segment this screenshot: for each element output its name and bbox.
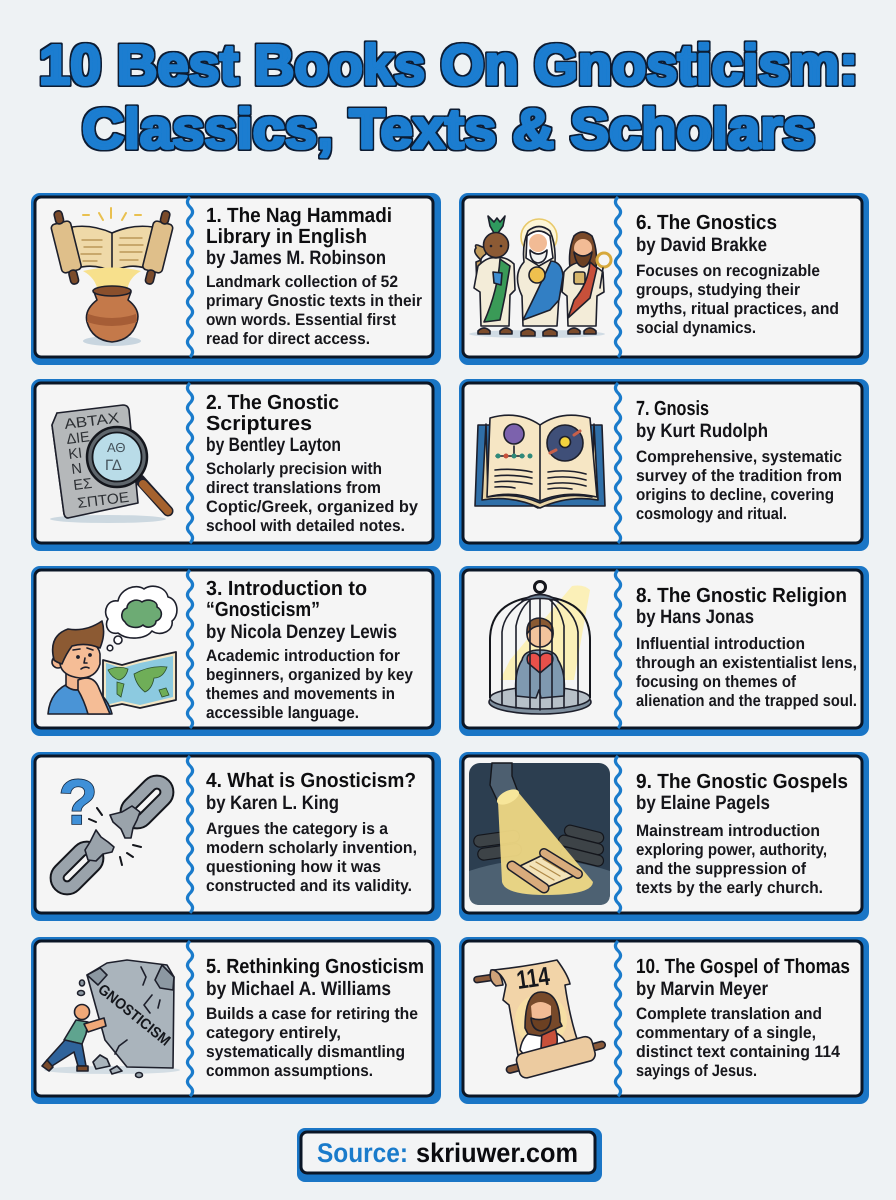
description	[636, 262, 839, 337]
description: sayings of Jesus.	[636, 1062, 757, 1080]
heading: 1. The Nag Hammadi	[206, 204, 392, 227]
panel: book 2	[31, 379, 441, 551]
icon: tablet and magnifying glass: ΑΒΤΑΧ	[64, 410, 120, 433]
description	[636, 822, 827, 897]
panel: book 10	[459, 937, 869, 1104]
icon: tablet and magnifying glass: ΕΣ	[73, 476, 93, 494]
icon: tablet and magnifying glass: ΚΙ	[68, 445, 83, 463]
description: direct translations from	[206, 479, 381, 497]
author: by James M. Robinson	[206, 247, 386, 269]
card frame	[459, 193, 869, 365]
description: Coptic/Greek, organized by	[206, 498, 419, 516]
icon: man holding heart in birdcage	[489, 582, 591, 714]
description	[206, 1005, 418, 1080]
description: Landmark collection of 52	[206, 273, 398, 291]
icon: three robed figures	[469, 216, 611, 338]
icon: tablet and magnifying glass: ΔΙΕ	[66, 429, 91, 448]
panel: book 3	[31, 566, 441, 736]
heading: Library in English	[206, 225, 367, 248]
card frame	[31, 193, 441, 365]
panel: book 4	[31, 752, 441, 921]
description: texts by the early church.	[636, 879, 823, 897]
description: and the suppression of	[636, 860, 806, 878]
icon: scroll with number 114 and portrait: 114	[515, 961, 552, 995]
card frame	[459, 379, 869, 551]
description: social dynamics.	[636, 319, 756, 337]
heading	[206, 204, 392, 248]
panel: book 8	[459, 566, 869, 736]
card frame	[31, 566, 441, 736]
description: common assumptions.	[206, 1062, 373, 1080]
title: Classics, Texts & Scholars	[82, 97, 815, 160]
heading	[206, 577, 367, 621]
icon: scroll with number 114 and portrait	[474, 960, 608, 1083]
description: constructed and its validity.	[206, 877, 412, 895]
description: questioning how it was	[206, 858, 381, 876]
icon: man pushing boulder labelled Gnosticism: GNOSTICISM	[94, 981, 174, 1049]
heading: 9. The Gnostic Gospels	[636, 770, 848, 793]
author: by Kurt Rudolph	[636, 420, 768, 442]
description	[636, 448, 842, 523]
description: Argues the category is a	[206, 820, 389, 838]
author: by Elaine Pagels	[636, 792, 770, 814]
icon: tablet and magnifying glass	[50, 405, 168, 523]
description: survey of the tradition from	[636, 467, 842, 485]
figure: right with red sash	[562, 232, 611, 334]
panel: book 1	[31, 193, 441, 365]
description: myths, ritual practices, and	[636, 300, 839, 318]
icon: tablet and magnifying glass: Ν	[71, 461, 83, 478]
source badge: Source:	[317, 1138, 408, 1168]
card frame	[31, 937, 441, 1104]
heading: 3. Introduction to	[206, 577, 367, 600]
description: exploring power, authority,	[636, 841, 827, 859]
heading: 4. What is Gnosticism?	[206, 769, 416, 792]
description: beginners, organized by key	[206, 666, 414, 684]
description: Mainstream introduction	[636, 822, 820, 840]
description: category entirely,	[206, 1024, 341, 1042]
description: groups, studying their	[636, 281, 801, 299]
description: cosmology and ritual.	[636, 505, 787, 523]
description: school with detailed notes.	[206, 517, 405, 535]
panel: book 7	[459, 379, 869, 551]
heading: 10. The Gospel of Thomas	[636, 955, 850, 978]
icon: tablet and magnifying glass: ΣΠΤΟΕ	[77, 490, 130, 512]
heading	[206, 391, 339, 435]
heading: 7. Gnosis	[636, 397, 709, 420]
icon: tablet and magnifying glass: ΓΔ	[105, 457, 122, 474]
description: Builds a case for retiring the	[206, 1005, 418, 1023]
heading: 6. The Gnostics	[636, 211, 777, 234]
author: by Hans Jonas	[636, 606, 754, 628]
icon: question mark and broken chain: ?	[58, 766, 98, 838]
author: by Bentley Layton	[206, 434, 341, 456]
icon: puzzled man with map and thought cloud	[48, 586, 177, 714]
panel: book 5	[31, 937, 441, 1104]
description	[206, 460, 419, 535]
description: distinct text containing 114	[636, 1043, 841, 1061]
description: themes and movements in	[206, 685, 395, 703]
card frame	[31, 379, 441, 551]
icon: question mark and broken chain	[53, 766, 171, 892]
description: through an existentialist lens,	[636, 654, 857, 672]
figure: centre with halo	[517, 219, 563, 336]
author: by Michael A. Williams	[206, 978, 391, 1000]
description: accessible language.	[206, 704, 359, 722]
title	[39, 33, 858, 160]
panel: book 6	[459, 193, 869, 365]
source badge	[297, 1128, 602, 1182]
icon: spotlight on scroll	[469, 763, 610, 905]
heading: Scriptures	[206, 412, 312, 435]
card frame	[459, 752, 869, 921]
heading: 8. The Gnostic Religion	[636, 584, 847, 607]
card frame	[459, 566, 869, 736]
panel: book 9	[459, 752, 869, 921]
heading: “Gnosticism”	[206, 598, 320, 621]
description: origins to decline, covering	[636, 486, 834, 504]
figure: left with ankh	[474, 216, 515, 334]
card frame	[31, 752, 441, 921]
description: focusing on themes of	[636, 673, 796, 691]
description: Complete translation and	[636, 1005, 822, 1023]
description: alienation and the trapped soul.	[636, 692, 857, 710]
icon: open book with cosmology diagrams	[475, 415, 605, 508]
icon: scroll over glowing jar	[48, 208, 176, 346]
author: by Karen L. King	[206, 792, 339, 814]
description: Scholarly precision with	[206, 460, 382, 478]
description	[636, 1005, 841, 1080]
description: Academic introduction for	[206, 647, 401, 665]
description: primary Gnostic texts in their	[206, 292, 423, 310]
heading: 5. Rethinking Gnosticism	[206, 955, 424, 978]
description: Comprehensive, systematic	[636, 448, 842, 466]
author: by Nicola Denzey Lewis	[206, 621, 397, 643]
description: read for direct access.	[206, 330, 370, 348]
card frame	[459, 937, 869, 1104]
description	[636, 635, 857, 710]
author: by David Brakke	[636, 234, 767, 256]
heading: 2. The Gnostic	[206, 391, 339, 414]
author: by Marvin Meyer	[636, 978, 768, 1000]
description	[206, 820, 417, 895]
description: Influential introduction	[636, 635, 805, 653]
description: own words. Essential first	[206, 311, 396, 329]
description: systematically dismantling	[206, 1043, 405, 1061]
source badge: skriuwer.com	[416, 1138, 578, 1168]
description	[206, 273, 423, 348]
icon: man pushing boulder labelled Gnosticism	[42, 960, 180, 1078]
description: modern scholarly invention,	[206, 839, 417, 857]
icon: tablet and magnifying glass: ΑΘ	[107, 440, 126, 455]
title: 10 Best Books On Gnosticism:	[39, 33, 858, 96]
description	[206, 647, 414, 722]
description: Focuses on recognizable	[636, 262, 820, 280]
description: commentary of a single,	[636, 1024, 816, 1042]
